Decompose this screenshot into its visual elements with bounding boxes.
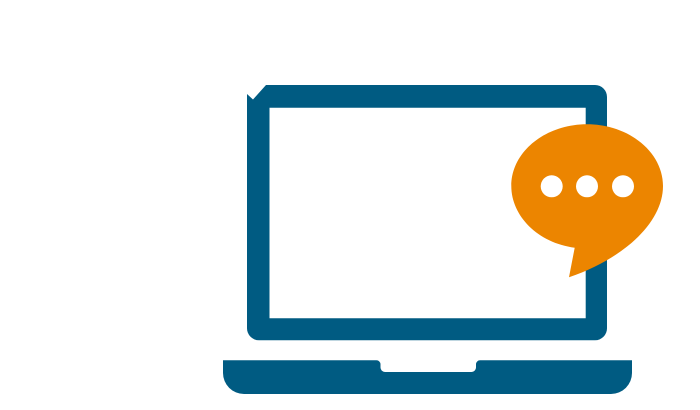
- dot two: [576, 175, 598, 197]
- icon: speech bubble: [511, 124, 663, 277]
- laptop base: [223, 360, 632, 394]
- bubble body: [511, 124, 663, 277]
- laptop screen frame: [247, 85, 607, 340]
- dot one: [541, 175, 563, 197]
- dot three: [612, 175, 634, 197]
- icon: laptop: [223, 85, 632, 394]
